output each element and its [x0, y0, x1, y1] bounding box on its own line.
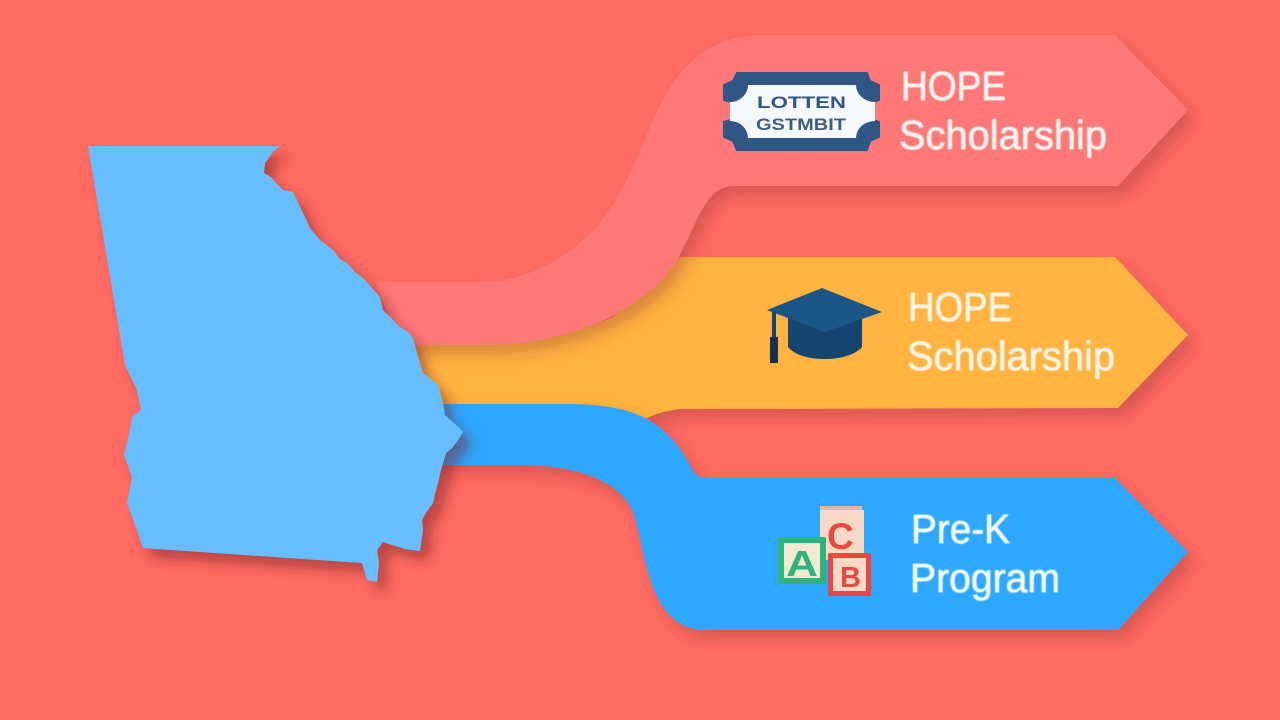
- label: Pre-K Program: Pre-K: [911, 506, 1010, 552]
- arrow ribbon: pink: [375, 35, 1188, 345]
- ribbon 2 content: cap and label: [767, 284, 1115, 379]
- ribbon 3 content: blocks and label: [778, 506, 1060, 601]
- label: Pre-K Program: Program: [910, 555, 1060, 601]
- ticket text: LOTTEN: [757, 93, 846, 112]
- block B: B: [840, 562, 861, 594]
- ribbon 1 content: ticket and label: [724, 63, 1107, 158]
- icon: alphabet blocks: [778, 506, 871, 596]
- arrow ribbon: orange: [410, 257, 1188, 419]
- label: HOPE Scholarship: HOPE: [908, 284, 1012, 330]
- icon: lottery ticket: GSTMBIT: [756, 115, 847, 134]
- block A: A: [786, 543, 818, 584]
- label: HOPE Scholarship: Scholarship: [899, 112, 1107, 158]
- label: HOPE Scholarship: [907, 284, 1115, 379]
- icon: graduation cap: [767, 288, 882, 363]
- label: HOPE Scholarship: [899, 63, 1107, 158]
- label: HOPE Scholarship: HOPE: [901, 63, 1006, 109]
- icon: lottery ticket: [724, 73, 879, 150]
- map of Georgia: [88, 146, 463, 582]
- block C: C: [827, 516, 854, 557]
- label: HOPE Scholarship: Scholarship: [907, 333, 1115, 379]
- label: Pre-K Program: [910, 506, 1060, 601]
- arrow ribbon: blue: [430, 404, 1188, 630]
